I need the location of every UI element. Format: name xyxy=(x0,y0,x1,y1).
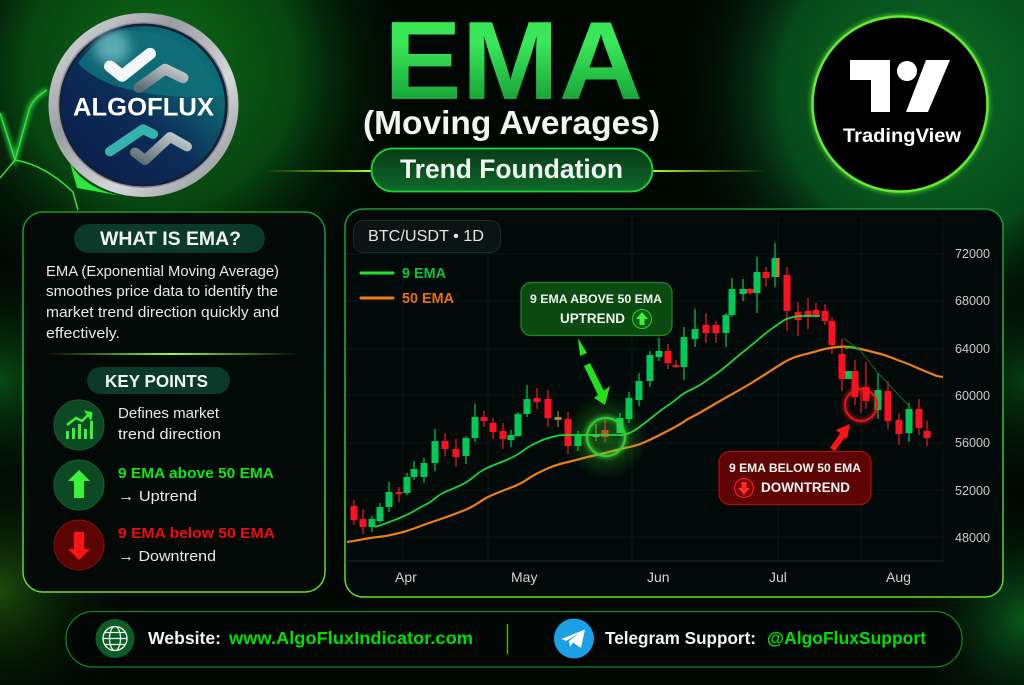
key point: trend direction: trend direction xyxy=(118,426,221,443)
text: website: www.AlgoFluxIndicator.com xyxy=(228,628,473,648)
legend: 9 EMA: 9 EMA xyxy=(402,266,447,282)
y axis labels: 48000 xyxy=(955,531,990,545)
x axis labels: May xyxy=(511,569,537,585)
y axis labels: 72000 xyxy=(955,247,990,261)
badge: Trend Foundation: Trend Foundation xyxy=(400,154,623,184)
marker: bearish crossover circle xyxy=(845,389,877,421)
y axis labels: 64000 xyxy=(955,342,990,356)
icon: globe xyxy=(96,619,134,658)
x axis labels: Apr xyxy=(395,569,417,585)
icon: callout up arrow xyxy=(632,310,652,328)
heading: what is EMA: WHAT IS EMA? xyxy=(100,229,241,250)
heading: key points: KEY POINTS xyxy=(105,371,208,391)
candlesticks xyxy=(354,243,927,534)
x axis labels xyxy=(395,569,911,585)
heading: key points xyxy=(87,367,230,394)
callout: downtrend: 9 EMA BELOW 50 EMA xyxy=(729,461,861,475)
icon: telegram xyxy=(554,618,594,658)
icon: TradingView mark xyxy=(850,60,950,112)
y axis labels: 52000 xyxy=(955,484,990,498)
logo: TradingView xyxy=(810,14,990,194)
arrow: uptrend pointer xyxy=(578,338,610,405)
y axis labels: 56000 xyxy=(955,436,990,450)
text: telegram support: Telegram Support: xyxy=(605,628,756,648)
chart symbol label xyxy=(354,220,500,252)
key point: uptrend xyxy=(118,465,274,505)
callout: uptrend xyxy=(521,282,672,336)
logo: AlgoFlux badge xyxy=(48,13,238,197)
text: EMA definition: effectively. xyxy=(46,325,120,342)
text: EMA definition: EMA (Exponential Moving Average) xyxy=(46,263,279,280)
panel: what is EMA xyxy=(23,212,325,592)
legend: 50 EMA xyxy=(361,291,455,307)
text: EMA definition xyxy=(46,263,279,342)
key point: trend direction xyxy=(118,405,221,443)
text: telegram support xyxy=(605,628,926,648)
key point: downtrend: → Downtrend xyxy=(118,548,216,565)
key point: downtrend: 9 EMA below 50 EMA xyxy=(118,525,275,542)
marker: bullish crossover circle xyxy=(564,395,648,479)
icon: growth chart xyxy=(54,400,104,450)
TradingView wordmark: TradingView xyxy=(843,125,962,147)
line: 9 EMA xyxy=(375,316,820,527)
text: EMA definition: smoothes price data to identify the xyxy=(46,283,278,300)
key point: uptrend: → Uptrend xyxy=(118,488,197,505)
text: telegram support: @AlgoFluxSupport xyxy=(767,628,926,648)
legend: 50 EMA: 50 EMA xyxy=(402,291,455,307)
callout: downtrend xyxy=(719,452,871,504)
subtitle: Moving Averages: (Moving Averages) xyxy=(363,104,660,141)
key point: trend direction: Defines market xyxy=(118,405,220,422)
decorative glow lines beside pill xyxy=(265,170,371,172)
heading: what is EMA xyxy=(74,224,265,253)
icon: down arrow xyxy=(54,520,104,570)
panel: price chart xyxy=(345,209,1003,597)
logo mark: upper chevrons xyxy=(110,54,183,88)
y axis labels: 60000 xyxy=(955,389,990,403)
arrow: downtrend pointer xyxy=(830,424,850,451)
x axis labels: Aug xyxy=(886,569,911,585)
badge: Trend Foundation xyxy=(372,148,652,192)
callout: downtrend: DOWNTREND xyxy=(761,480,850,495)
legend: 9 EMA xyxy=(361,266,447,282)
logo mark: lower chevrons xyxy=(110,129,187,160)
logo wordmark: ALGOFLUX xyxy=(73,94,214,122)
text: EMA definition: market trend direction quickly and xyxy=(46,304,279,321)
line: 50 EMA xyxy=(347,347,943,542)
text: website: Website: xyxy=(148,628,221,648)
y axis labels xyxy=(955,247,990,545)
icon: callout down arrow xyxy=(734,478,754,498)
key point: uptrend: 9 EMA above 50 EMA xyxy=(118,465,274,482)
icon: up arrow xyxy=(54,460,104,510)
title: EMA: EMA xyxy=(384,0,643,123)
callout: uptrend: 9 EMA ABOVE 50 EMA xyxy=(530,292,662,306)
footer bar xyxy=(66,612,962,667)
key point: downtrend xyxy=(118,525,275,565)
x axis labels: Jun xyxy=(647,569,670,585)
x axis labels: Jul xyxy=(769,569,787,585)
chart symbol label: BTC/USDT • 1D xyxy=(368,228,484,245)
callout: uptrend: UPTREND xyxy=(560,311,625,326)
y axis labels: 68000 xyxy=(955,294,990,308)
